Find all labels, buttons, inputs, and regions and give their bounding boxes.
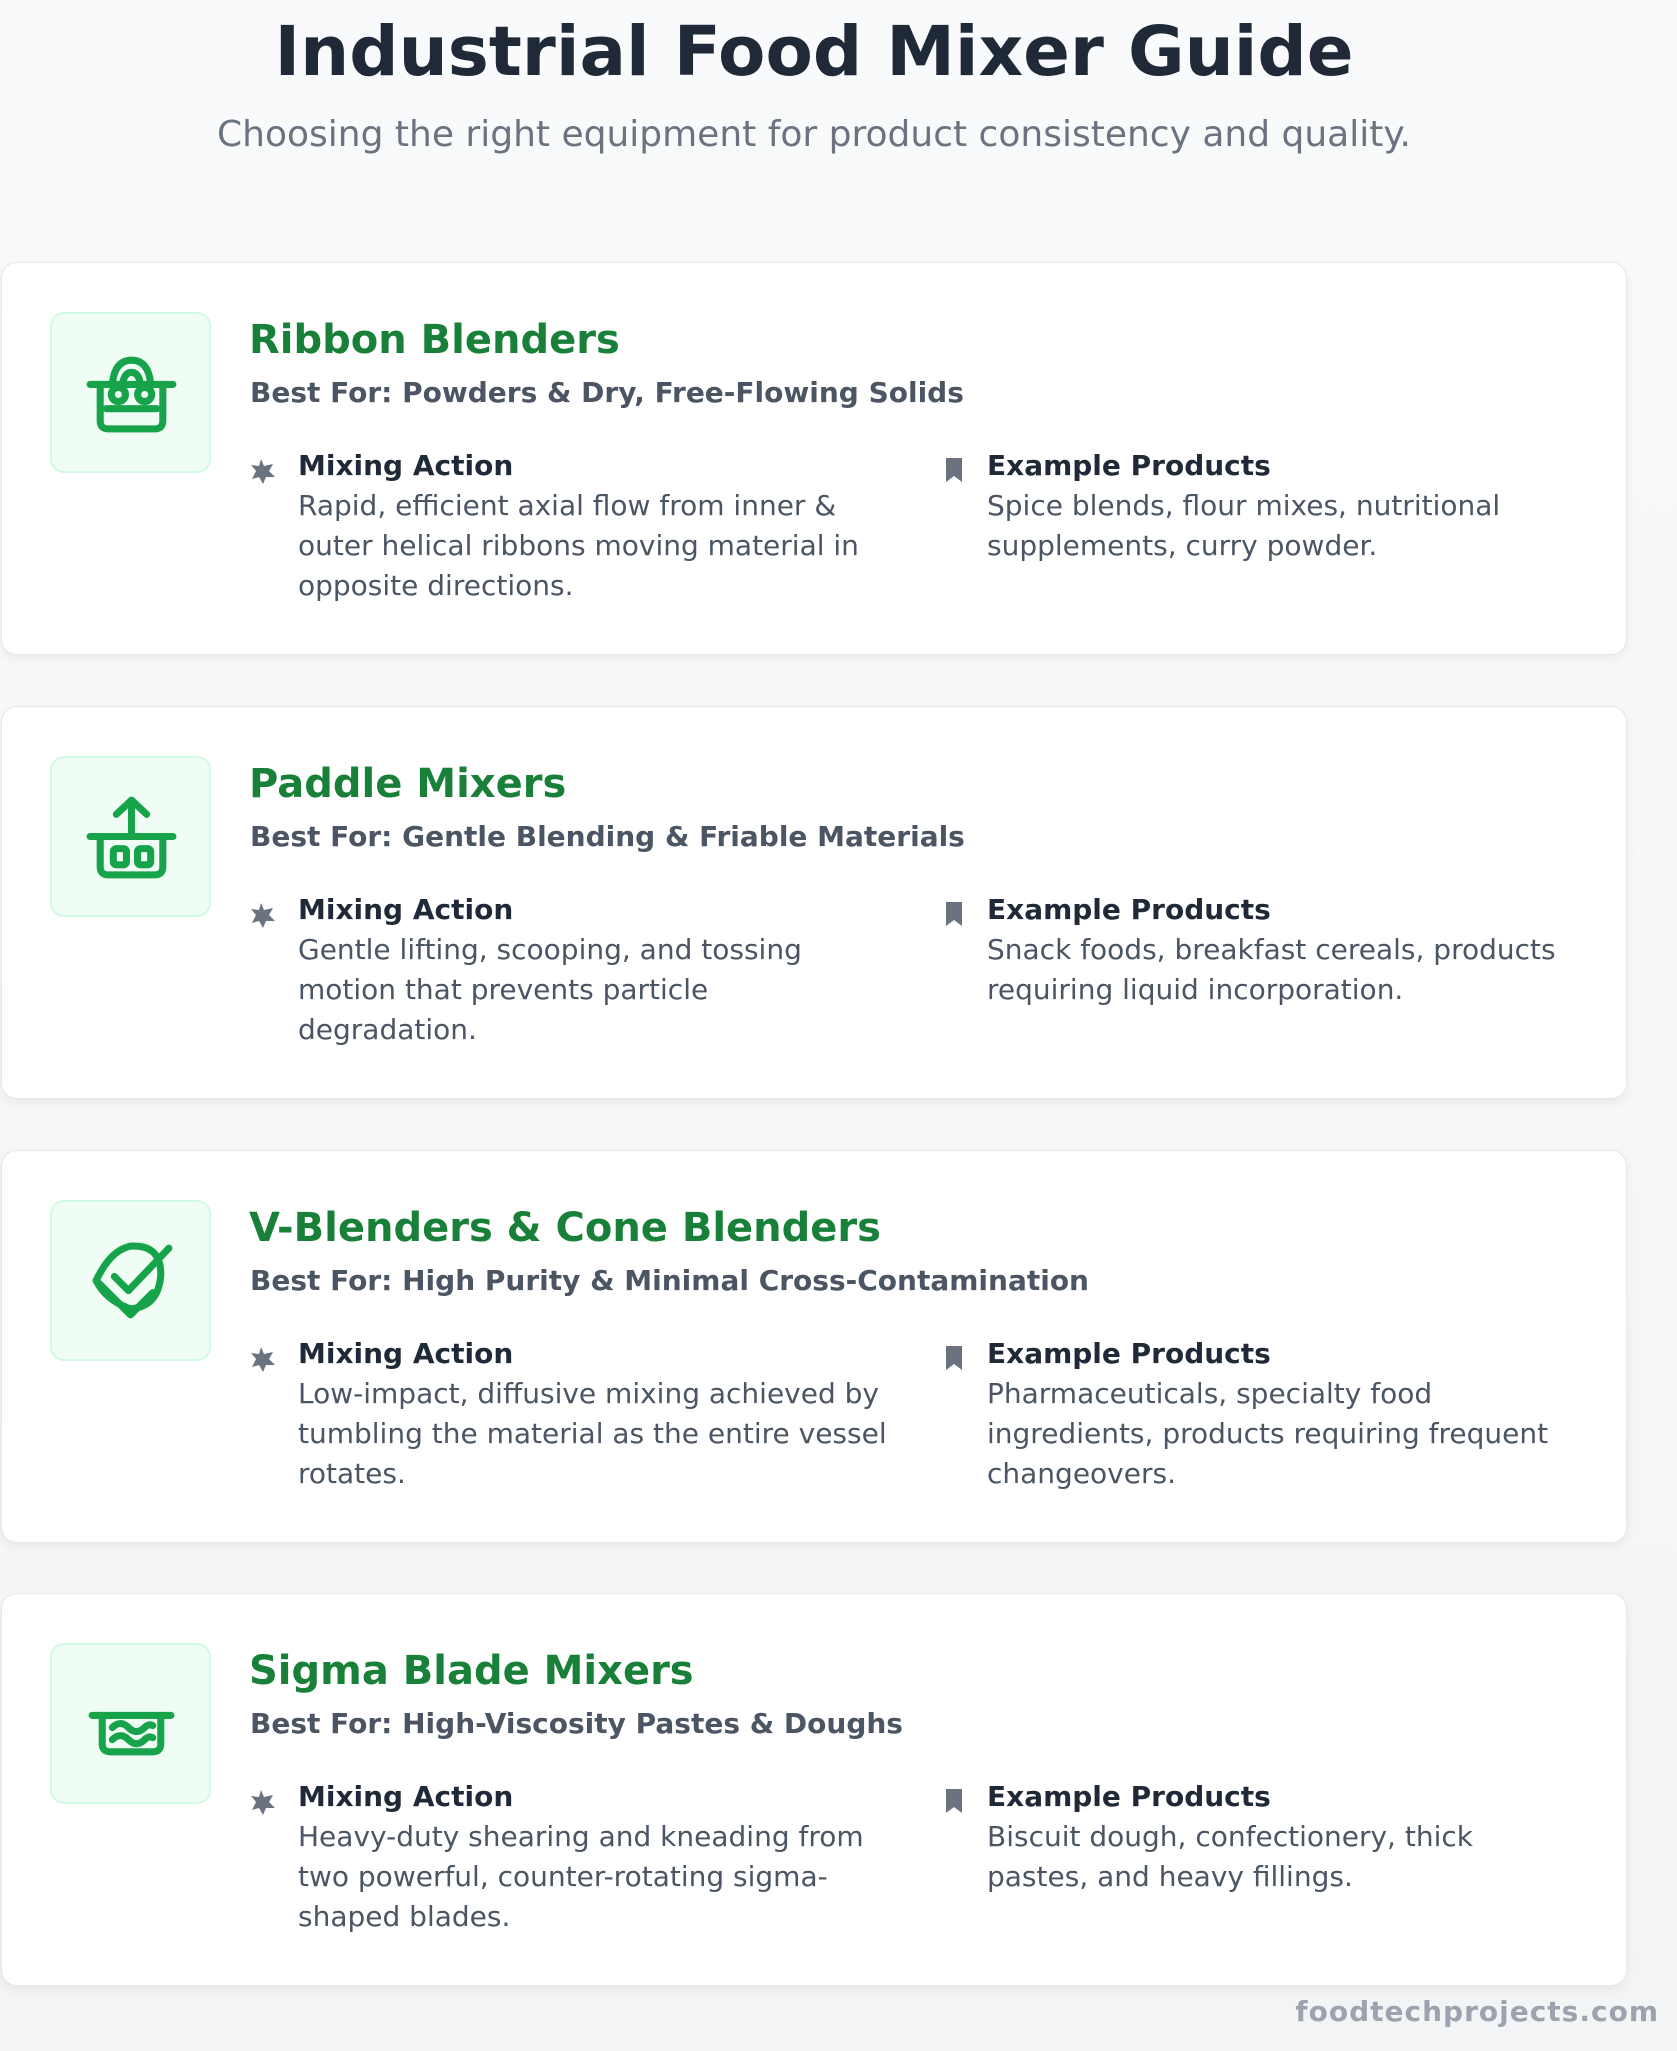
heading: Paddle Mixers <box>249 761 566 807</box>
mixing action <box>251 1780 864 1933</box>
icon: sigma mixer <box>50 1643 211 1804</box>
heading: Sigma Blade Mixers <box>249 1648 694 1694</box>
icon: paddle mixer <box>50 756 211 917</box>
example products: Biscuit dough, confectionery, thick pastes, and heavy fillings. <box>987 1820 1473 1893</box>
panel: ribbon blenders <box>1 262 1627 655</box>
best for: Best For: Powders & Dry, Free-Flowing Solids <box>250 376 964 409</box>
footer: foodtechprojects.com <box>1295 1995 1659 2028</box>
example products: Spice blends, flour mixes, nutritional supplements, curry powder. <box>987 489 1500 562</box>
mixing action: Gentle lifting, scooping, and tossing motion that prevents particle degradation. <box>298 933 802 1046</box>
title: Industrial Food Mixer Guide <box>274 12 1354 92</box>
mixing action: Low-impact, diffusive mixing achieved by tumbling the material as the entire vessel rotates. <box>298 1377 887 1490</box>
mixing action: Rapid, efficient axial flow from inner & outer helical ribbons moving material in opposite directions. <box>298 489 859 602</box>
example products: Snack foods, breakfast cereals, products requiring liquid incorporation. <box>987 933 1556 1006</box>
panel: paddle mixers <box>1 706 1627 1099</box>
mixing action: Mixing Action <box>298 893 513 926</box>
example products: Example Products <box>987 1337 1271 1370</box>
best for: Best For: High-Viscosity Pastes & Doughs <box>250 1707 903 1740</box>
example products: Example Products <box>987 449 1271 482</box>
heading: Ribbon Blenders <box>249 317 620 363</box>
mixing action <box>251 893 802 1046</box>
example products <box>946 893 1556 1006</box>
mixing action: Mixing Action <box>298 1780 513 1813</box>
icon: v-blender <box>50 1200 211 1361</box>
panel: sigma blade mixers <box>1 1593 1627 1986</box>
mixing action: Mixing Action <box>298 449 513 482</box>
example products <box>946 1337 1548 1490</box>
mixing action <box>251 449 859 602</box>
mixing action: Heavy-duty shearing and kneading from two powerful, counter-rotating sigma-shaped blades. <box>298 1820 864 1933</box>
icon: ribbon blender <box>50 312 211 473</box>
mixing action: Mixing Action <box>298 1337 513 1370</box>
example products: Example Products <box>987 893 1271 926</box>
example products: Pharmaceuticals, specialty food ingredients, products requiring frequent changeovers. <box>987 1377 1548 1490</box>
subtitle: Choosing the right equipment for product consistency and quality. <box>217 114 1411 155</box>
best for: Best For: High Purity & Minimal Cross-Contamination <box>250 1264 1089 1297</box>
example products <box>946 1780 1473 1893</box>
panel: v-blenders <box>1 1150 1627 1543</box>
mixing action <box>251 1337 887 1490</box>
example products <box>946 449 1500 562</box>
best for: Best For: Gentle Blending & Friable Materials <box>250 820 965 853</box>
heading: V-Blenders & Cone Blenders <box>249 1205 881 1251</box>
example products: Example Products <box>987 1780 1271 1813</box>
